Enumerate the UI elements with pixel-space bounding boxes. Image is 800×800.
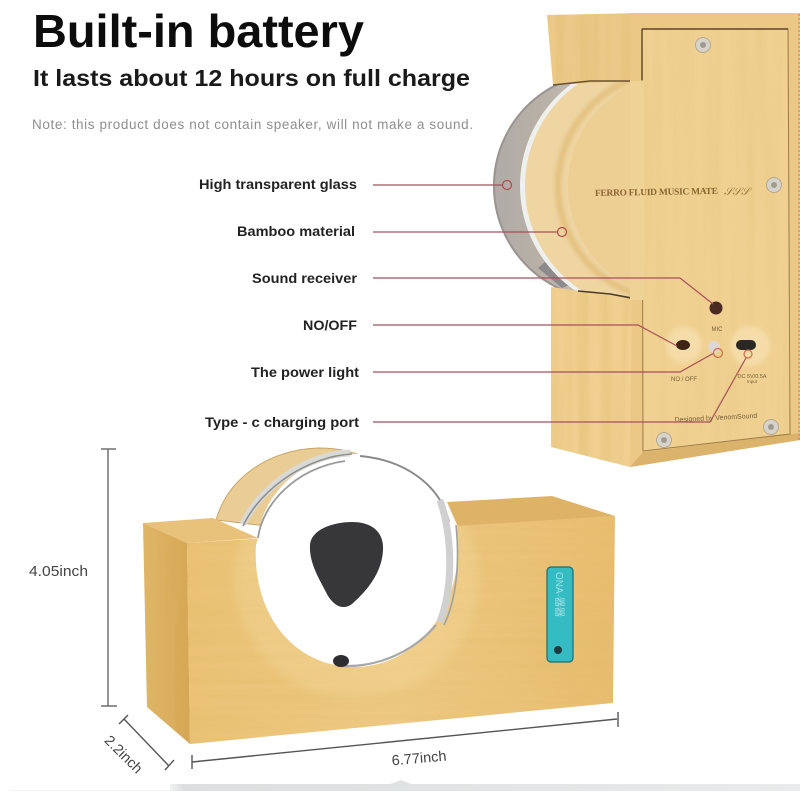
top surfaces bbox=[143, 518, 258, 543]
callout: sound receiver: Sound receiver bbox=[252, 271, 358, 286]
front face bbox=[187, 516, 615, 744]
callout labels and leader lines bbox=[199, 177, 752, 430]
callout: type-c charging port bbox=[205, 350, 752, 430]
callout: power light bbox=[251, 348, 722, 380]
callout: on off switch bbox=[303, 318, 677, 346]
rear disc arc bbox=[216, 448, 362, 530]
front view of product bbox=[140, 448, 617, 746]
subtitle: It lasts about 12 hours on full charge bbox=[33, 65, 470, 91]
dimension: width: 6.77inch bbox=[391, 749, 447, 769]
front frame bbox=[630, 13, 800, 467]
callout: type-c charging port: Type - c charging port bbox=[205, 415, 360, 430]
controls and ports: Input bbox=[747, 379, 758, 384]
dotted image edge bbox=[798, 14, 800, 440]
engraved signature: 𝒮𝒮𝒮 bbox=[724, 186, 753, 198]
glass disc edge bbox=[493, 82, 630, 298]
controls and ports: Designed by VenomSound bbox=[674, 413, 758, 424]
controls and ports: MIC bbox=[712, 327, 723, 333]
back view of product bbox=[493, 10, 800, 470]
controls and ports: NO / OFF bbox=[671, 377, 697, 383]
dimension: width bbox=[192, 712, 618, 769]
callout: bamboo material: Bamboo material bbox=[237, 224, 355, 239]
screws bbox=[656, 38, 782, 448]
callout: high transparent glass bbox=[199, 177, 512, 192]
bottom divider band bbox=[10, 780, 800, 791]
teal display label bbox=[547, 567, 573, 662]
top left block bbox=[547, 13, 630, 86]
back panel bbox=[630, 29, 790, 451]
callout: high transparent glass: High transparent glass bbox=[199, 177, 357, 192]
left side face bbox=[143, 523, 190, 744]
dimension: depth bbox=[101, 715, 174, 777]
teal display label: ONA·器器 bbox=[553, 572, 565, 617]
title: Built-in battery bbox=[33, 5, 364, 57]
ferrofluid blob bbox=[310, 522, 383, 607]
engraved product name: FERRO FLUID MUSIC MATE bbox=[595, 187, 718, 199]
controls and ports bbox=[666, 302, 770, 424]
callout: sound receiver bbox=[252, 271, 713, 304]
note text: Note: this product does not contain speaker, will not make a sound. bbox=[32, 117, 473, 132]
dimension: depth: 2.2inch bbox=[101, 733, 145, 777]
callout: bamboo material bbox=[237, 224, 566, 239]
dimension: height: 4.05inch bbox=[29, 563, 88, 580]
small ferrofluid drop bbox=[333, 655, 349, 667]
lower left block bbox=[551, 287, 632, 467]
callout: on off switch: NO/OFF bbox=[303, 318, 357, 333]
callout: power light: The power light bbox=[251, 365, 360, 380]
glass disc bbox=[243, 453, 458, 667]
controls and ports: DC 5V/0.5A bbox=[737, 374, 767, 380]
